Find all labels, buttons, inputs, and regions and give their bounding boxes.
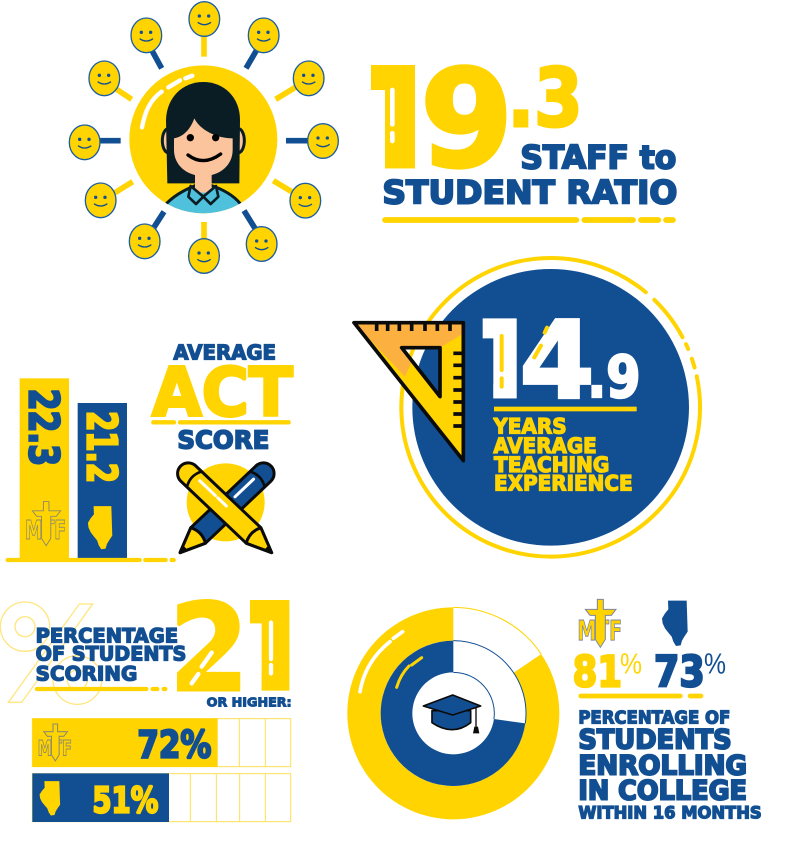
text: years average teaching experience: [492, 415, 633, 496]
panel: college enrollment: [347, 599, 762, 823]
heading: score: SCORE: [177, 426, 269, 455]
icon: graduation cap: [423, 695, 481, 733]
icon: Illinois: [88, 506, 112, 549]
label: or higher: OR HIGHER:: [207, 694, 292, 709]
heading: staff to: STAFF to: [520, 139, 676, 177]
icon: crossed pencils: [173, 458, 279, 560]
panel: staff to student ratio illustration: [69, 2, 338, 273]
underline dashes: [37, 682, 165, 695]
icon: MTF school logo: MTF: [25, 516, 66, 546]
text: percentage of students enrolling in college within 16 months: ENROLLING: [578, 751, 747, 781]
heading: percentage of students scoring: SCORING: [36, 662, 137, 685]
icon: MTF school logo: MTF: [577, 614, 622, 647]
text: years average teaching experience: EXPERIENCE: [494, 472, 633, 496]
heading: average: AVERAGE: [173, 341, 276, 365]
baseline dashes: [8, 553, 174, 566]
bar: state 21.2: [78, 403, 127, 558]
heading: percentage of students scoring: [36, 624, 186, 685]
big number 21: 2: [169, 579, 249, 719]
big number 14.9: 1: [477, 296, 553, 424]
big number 14.9: 4: [519, 300, 595, 424]
icon: outlined percent sign: [0, 602, 102, 704]
panel: years of teaching experience: [352, 256, 702, 559]
connector stems: [99, 36, 308, 239]
heading: student ratio: STUDENT RATIO: [382, 174, 677, 212]
panel: percentage scoring 21 or higher: [0, 599, 292, 822]
text: years average teaching experience: AVERAGE: [493, 434, 597, 458]
text: percentage of students enrolling in college within 16 months: STUDENTS: [578, 725, 732, 756]
icon: Illinois: [40, 781, 60, 816]
divider bar: [494, 407, 637, 411]
icon: student faces: [69, 2, 338, 273]
big number 21: [176, 599, 290, 692]
text: percentage of students enrolling in college within 16 months: IN COLLEGE: [578, 776, 747, 806]
text: percentage of students enrolling in college within 16 months: [578, 708, 762, 823]
icon: MTF school logo: [577, 599, 622, 647]
icon: MTF school logo: [25, 502, 66, 546]
big number 19.3: [371, 64, 578, 170]
icon: Illinois: [662, 601, 688, 646]
heading: percentage of students scoring: OF STUDENTS: [36, 643, 186, 666]
bar: school 72 percent: [32, 718, 291, 767]
bar: state 51 percent: [32, 773, 291, 822]
icon: MTF school logo: MTF: [38, 736, 72, 761]
panel: 19.3 staff to student ratio text: [371, 64, 677, 223]
big number 14.9: [482, 318, 638, 400]
underline dashes: [385, 211, 673, 228]
heading: ACT: ACT: [152, 353, 293, 431]
panel: average ACT score: [8, 341, 293, 560]
big number 19.3: 9: [420, 41, 513, 198]
stat: state 73 percent: 73: [654, 647, 705, 696]
donut chart: [347, 607, 559, 819]
underline dashes: [581, 689, 701, 703]
stat: state 73 percent: %: [704, 648, 726, 680]
icon: MTF school logo: [38, 724, 72, 761]
blue circle with yellow ring: [340, 196, 762, 618]
stat: school 81 percent: %: [620, 648, 642, 680]
bar: school 22.3: [19, 378, 69, 558]
text: percentage of students enrolling in college within 16 months: WITHIN 16 MONTHS: [578, 803, 762, 823]
icon: teacher in yellow circle: [129, 65, 277, 220]
bar: school 72 percent: 72%: [137, 722, 211, 766]
stat: school 81 percent: 81: [573, 647, 622, 696]
big number 19.3: 1: [365, 35, 465, 202]
bar: state 21.2: 21.2: [78, 411, 126, 483]
big number 21: 1: [245, 578, 331, 721]
text: years average teaching experience: TEACHING: [494, 453, 609, 477]
big number 19.3: .3: [508, 52, 583, 145]
text: years average teaching experience: YEARS: [492, 415, 567, 439]
bar: school 22.3: 22.3: [19, 389, 67, 466]
icon: set square ruler: [354, 323, 463, 461]
text: percentage of students enrolling in college within 16 months: PERCENTAGE OF: [578, 708, 730, 729]
heading: percentage of students scoring: PERCENTAGE: [36, 624, 178, 647]
underline dashes: [153, 416, 289, 429]
bar: state 51 percent: 51%: [92, 780, 158, 821]
big number 14.9: .9: [587, 343, 641, 411]
